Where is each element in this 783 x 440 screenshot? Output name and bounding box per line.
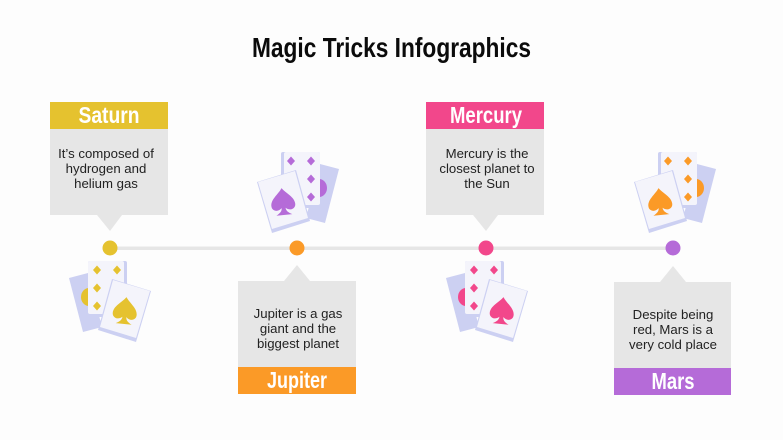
Jupiter timeline dot bbox=[290, 240, 304, 256]
icon: Mercury playing cards bbox=[446, 261, 528, 342]
icon: Saturn playing cards bbox=[69, 261, 151, 342]
Mars heading: Mars bbox=[652, 368, 694, 394]
icon: Mars playing cards bbox=[634, 152, 716, 233]
Saturn description: It’s composed of bbox=[58, 146, 154, 161]
Mercury heading: Mercury bbox=[450, 102, 522, 128]
Saturn description: helium gas bbox=[74, 176, 138, 191]
Saturn callout box bbox=[50, 129, 168, 231]
Mercury description: the Sun bbox=[464, 176, 510, 191]
Mercury description: closest planet to bbox=[439, 161, 535, 176]
panel: Mercury bbox=[426, 102, 544, 342]
Mars callout box bbox=[614, 266, 731, 368]
Jupiter callout box bbox=[238, 265, 356, 367]
Mars description: very cold place bbox=[629, 337, 717, 352]
panel: Mars bbox=[614, 152, 731, 395]
Jupiter description: giant and the bbox=[260, 321, 336, 336]
Mars heading bbox=[614, 368, 731, 395]
Mercury description: Mercury is the bbox=[446, 146, 528, 161]
icon: Jupiter playing cards bbox=[257, 152, 339, 233]
Jupiter description: Jupiter is a gas bbox=[254, 306, 343, 321]
Jupiter heading: Jupiter bbox=[267, 367, 327, 393]
Mars timeline dot bbox=[666, 240, 680, 256]
panel: Saturn bbox=[50, 102, 168, 342]
Jupiter heading bbox=[238, 367, 356, 394]
Saturn timeline dot bbox=[102, 240, 118, 256]
Jupiter description: biggest planet bbox=[257, 336, 339, 351]
Saturn heading: Saturn bbox=[78, 102, 140, 128]
Mercury timeline dot bbox=[478, 240, 494, 256]
Saturn description: hydrogen and bbox=[66, 161, 146, 176]
Mars description: red, Mars is a bbox=[633, 322, 714, 337]
Saturn heading bbox=[50, 102, 168, 129]
Mars description: Despite being bbox=[633, 307, 713, 322]
panel: Jupiter bbox=[238, 152, 356, 394]
Mercury callout box bbox=[426, 129, 544, 231]
title: Magic Tricks Infographics bbox=[252, 32, 531, 63]
timeline line bbox=[110, 246, 673, 250]
